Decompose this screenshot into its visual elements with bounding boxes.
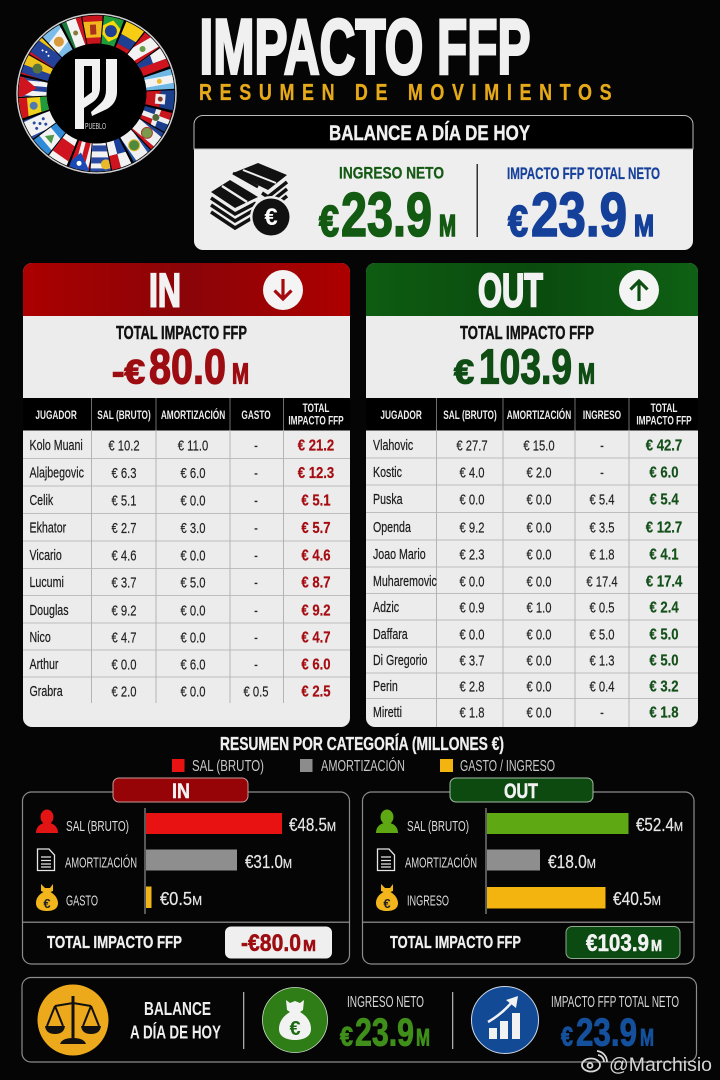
value box: -80.0M	[225, 926, 332, 958]
table header: TOTAL	[303, 403, 329, 415]
rows: € 1.8	[459, 704, 485, 721]
rows: € 2.5	[301, 683, 331, 701]
logo: flag ring with PJ Pueblo	[16, 13, 177, 174]
rows: Nico	[29, 628, 51, 645]
rows: Lucumi	[29, 573, 64, 590]
rows: Ekhator	[29, 519, 67, 536]
label: impacto ffp total neto: IMPACTO FFP TOTAL NETO	[507, 165, 660, 183]
icon: money bag: €	[43, 896, 51, 911]
bar chart: IN: €31.0M	[245, 852, 292, 872]
rows: € 2.0	[111, 683, 137, 700]
value: impacto ffp total neto: €	[561, 1022, 573, 1052]
table header	[380, 403, 692, 428]
table header: JUGADOR	[35, 410, 77, 422]
table: OUT players	[366, 398, 698, 727]
icon: money bag in green circle	[262, 988, 328, 1052]
rows: € 2.0	[526, 464, 552, 481]
rows: Puska	[373, 490, 403, 507]
rows: € 1.8	[649, 704, 679, 722]
rows: € 0.0	[526, 626, 552, 643]
rows: € 4.7	[111, 629, 137, 646]
pill: IN	[113, 778, 248, 803]
icon: scales in gold circle	[38, 984, 108, 1056]
text: balance a dia de hoy: A DÍA DE HOY	[130, 1022, 221, 1042]
rows: € 12.7	[646, 519, 682, 537]
rows: Kolo Muani	[29, 436, 83, 453]
rows: Douglas	[29, 601, 69, 618]
bar chart: OUT	[486, 808, 683, 914]
legend: GASTO / INGRESO	[460, 758, 555, 775]
rows: -	[254, 547, 258, 564]
heading: balance: BALANCE A DÍA DE HOY	[329, 122, 530, 145]
value: 103.9M: €	[454, 354, 474, 392]
rows: Arthur	[29, 655, 59, 672]
panel: summary IN	[22, 778, 350, 964]
label: ingreso: INGRESO	[407, 892, 449, 910]
rows: € 6.0	[180, 464, 206, 481]
rows: € 1.8	[589, 546, 615, 563]
rows: € 8.7	[301, 574, 331, 592]
rows: € 0.0	[180, 492, 206, 509]
rows: € 0.0	[459, 626, 485, 643]
value: 103.9M: M	[578, 358, 595, 390]
rows: € 0.0	[459, 573, 485, 590]
heading: resumen por categoria: RESUMEN POR CATEGORÍA (MILLONES €)	[220, 733, 504, 754]
bar chart: OUT: €40.5M	[613, 889, 661, 909]
rows: € 5.0	[649, 626, 679, 644]
rows: € 0.0	[526, 491, 552, 508]
rows: € 3.0	[180, 519, 206, 536]
rows: € 1.0	[526, 599, 552, 616]
rows	[30, 436, 334, 701]
watermark: weibo @Marchisio: @Marchisio	[609, 1054, 712, 1076]
pill: IN: IN	[172, 780, 190, 803]
rows: € 0.0	[526, 652, 552, 669]
rows: € 27.7	[456, 437, 488, 454]
table header: GASTO	[241, 410, 271, 422]
table header: AMORTIZACIÓN	[507, 408, 571, 422]
value: -80.0M: 80.0	[149, 340, 226, 394]
rows: € 0.0	[526, 704, 552, 721]
icon: person green	[376, 810, 398, 833]
value box: 103.9M	[566, 926, 680, 958]
value: impacto ffp total neto: 23.9	[531, 181, 627, 250]
panel: balance a dia de hoy	[194, 116, 693, 250]
rows: € 6.0	[180, 656, 206, 673]
rows: Celik	[29, 491, 54, 508]
icon: money bag in green circle: €	[289, 1018, 301, 1040]
rows: € 0.0	[526, 546, 552, 563]
heading: OUT: OUT	[478, 264, 543, 316]
rows: € 6.3	[111, 464, 137, 481]
rows: € 12.3	[298, 465, 334, 482]
value box: -80.0M: -€80.0	[241, 930, 301, 957]
rows: Miretti	[373, 703, 402, 720]
panel: summary OUT	[362, 778, 694, 964]
rows: € 5.7	[301, 520, 331, 537]
rows: € 5.0	[589, 626, 615, 643]
value: ingreso neto: 23.9	[341, 181, 432, 250]
rows: € 2.4	[649, 599, 679, 617]
rows: € 9.2	[111, 602, 137, 619]
rows: -	[254, 492, 258, 509]
value: ingreso neto: M	[416, 1024, 430, 1052]
value box: -80.0M: M	[303, 938, 316, 955]
label: gasto: GASTO	[66, 892, 98, 910]
icon: money bag: €	[383, 896, 391, 911]
text: balance a dia de hoy	[130, 998, 221, 1042]
rows: Perin	[373, 677, 398, 694]
label: sal bruto: SAL (BRUTO)	[407, 818, 469, 835]
rows: € 17.4	[586, 573, 618, 590]
rows: € 0.0	[180, 629, 206, 646]
rows: € 6.0	[649, 464, 679, 482]
rows: € 3.2	[649, 678, 679, 696]
rows: € 4.7	[301, 629, 331, 647]
rows: € 0.9	[459, 599, 485, 616]
rows: -	[254, 437, 258, 454]
icon: money bag	[376, 884, 398, 911]
rows: € 42.7	[646, 437, 682, 455]
rows: Daffara	[373, 625, 408, 642]
rows: Grabra	[29, 682, 63, 699]
logo: flag ring with PJ Pueblo: PUEBLO	[85, 122, 106, 131]
table header	[35, 403, 344, 428]
bar chart: IN	[144, 808, 336, 914]
rows: € 3.5	[589, 519, 615, 536]
rows: € 5.0	[180, 574, 206, 591]
table header: TOTAL	[651, 403, 677, 415]
rows: -	[254, 519, 258, 536]
rows: € 0.0	[526, 573, 552, 590]
label: ingreso neto: INGRESO NETO	[339, 164, 444, 182]
rows: € 2.7	[111, 519, 137, 536]
table header: SAL (BRUTO)	[443, 410, 497, 422]
value: -80.0M: M	[232, 358, 249, 390]
rows: € 21.2	[298, 437, 334, 455]
rows: € 0.4	[589, 678, 615, 695]
rows: € 1.3	[589, 652, 615, 669]
rows: € 0.0	[526, 678, 552, 695]
icon: arrow down	[263, 270, 303, 310]
value: impacto ffp total neto: €	[508, 197, 528, 246]
rows: Adzic	[373, 598, 399, 615]
rows: € 15.0	[523, 437, 555, 454]
rows: Openda	[373, 518, 412, 535]
rows: € 0.5	[589, 599, 615, 616]
bar chart: IN: €48.5M	[289, 815, 336, 835]
label: amortizacion: AMORTIZACIÓN	[405, 854, 477, 872]
rows: € 9.2	[301, 602, 331, 620]
heading: IN: IN	[149, 264, 181, 316]
value: -80.0M: -€	[112, 354, 145, 392]
rows: € 5.1	[301, 492, 331, 510]
table header: IMPACTO FFP	[288, 415, 344, 428]
rows	[373, 436, 683, 722]
icon: money bag	[36, 884, 58, 911]
pill: OUT	[450, 778, 593, 803]
rows: -	[254, 602, 258, 619]
rows: € 3.7	[459, 652, 485, 669]
rows: Di Gregorio	[373, 651, 427, 668]
icon: document	[378, 849, 394, 870]
rows: Vicario	[29, 546, 62, 563]
rows: € 0.0	[111, 656, 137, 673]
value: impacto ffp total neto: M	[634, 208, 654, 243]
bar chart: OUT: €18.0M	[548, 852, 596, 872]
panel: IN	[23, 263, 350, 727]
value: impacto ffp total neto: 23.9	[576, 1012, 637, 1054]
rows: -	[254, 656, 258, 673]
watermark: weibo @Marchisio	[582, 1051, 712, 1076]
rows: € 6.0	[301, 656, 331, 674]
legend	[172, 758, 555, 775]
label: sal bruto: SAL (BRUTO)	[66, 818, 129, 835]
rows: € 4.6	[111, 547, 137, 564]
icon: person red	[36, 810, 58, 833]
table header: JUGADOR	[380, 410, 422, 422]
value box: 103.9M: €103.9	[586, 930, 649, 957]
table header: AMORTIZACIÓN	[161, 408, 225, 422]
table header: INGRESO	[583, 410, 621, 422]
rows: -	[600, 437, 604, 454]
rows: € 5.4	[589, 491, 615, 508]
rows: € 17.4	[646, 573, 683, 591]
icon: arrow up	[619, 270, 659, 310]
rows: € 2.8	[459, 678, 485, 695]
icon: stack of money with euro	[211, 163, 292, 238]
rows: -	[254, 629, 258, 646]
rows: € 9.2	[459, 519, 485, 536]
value: ingreso neto: M	[439, 208, 456, 243]
label: total impacto ffp: TOTAL IMPACTO FFP	[116, 323, 247, 343]
table header: IMPACTO FFP	[636, 415, 692, 428]
label: amortizacion: AMORTIZACIÓN	[65, 854, 137, 872]
bar chart: OUT: €52.4M	[636, 815, 683, 835]
rows: € 4.6	[301, 547, 331, 565]
value: ingreso neto: €	[340, 1022, 353, 1052]
label: total impacto ffp: TOTAL IMPACTO FFP	[47, 932, 182, 952]
label: total impacto ffp: TOTAL IMPACTO FFP	[390, 932, 521, 952]
legend: SAL (BRUTO)	[192, 758, 264, 775]
legend: AMORTIZACIÓN	[321, 758, 405, 775]
bar chart: IN: €0.5M	[160, 889, 202, 909]
rows: € 5.4	[649, 491, 679, 509]
rows: € 0.0	[526, 519, 552, 536]
icon: stack of money with euro: €	[264, 204, 278, 231]
table header: SAL (BRUTO)	[97, 410, 151, 422]
value: ingreso neto: 23.9	[355, 1012, 414, 1054]
panel: OUT	[366, 263, 698, 727]
text: balance a dia de hoy: BALANCE	[144, 998, 211, 1019]
panel: bottom balance bar	[22, 978, 696, 1062]
rows: € 5.0	[649, 652, 679, 670]
rows: € 5.1	[111, 492, 137, 509]
icon: document	[38, 849, 54, 870]
rows: € 0.5	[243, 683, 269, 700]
title: IMPACTO FFP	[200, 2, 530, 90]
rows: Joao Mario	[373, 545, 426, 562]
rows: Kostic	[373, 463, 402, 480]
rows: € 2.3	[459, 546, 485, 563]
rows: Vlahovic	[373, 436, 414, 453]
rows: -	[254, 574, 258, 591]
label: ingreso neto: INGRESO NETO	[347, 994, 424, 1011]
rows: € 0.0	[459, 491, 485, 508]
rows: € 4.0	[459, 464, 485, 481]
rows: -	[600, 704, 604, 721]
rows: € 0.0	[180, 547, 206, 564]
rows: € 4.1	[649, 546, 679, 564]
rows: Alajbegovic	[29, 464, 84, 481]
subtitle: RESUMEN DE MOVIMIENTOS	[199, 80, 612, 106]
value: 103.9M: 103.9	[479, 340, 572, 394]
table: IN players	[23, 398, 350, 703]
value: impacto ffp total neto: M	[640, 1024, 654, 1052]
rows: € 11.0	[178, 437, 208, 454]
icon: rising chart in blue circle	[472, 986, 538, 1054]
rows: € 0.0	[180, 683, 206, 700]
rows: € 10.2	[108, 437, 140, 454]
value box: 103.9M: M	[651, 938, 662, 955]
rows: Muharemovic	[373, 572, 437, 589]
rows: € 0.0	[180, 602, 206, 619]
pill: OUT: OUT	[504, 780, 538, 803]
rows: -	[600, 464, 604, 481]
rows: € 3.7	[111, 574, 137, 591]
value: ingreso neto: €	[319, 197, 339, 246]
rows: -	[254, 464, 258, 481]
label: total impacto ffp: TOTAL IMPACTO FFP	[460, 323, 594, 343]
